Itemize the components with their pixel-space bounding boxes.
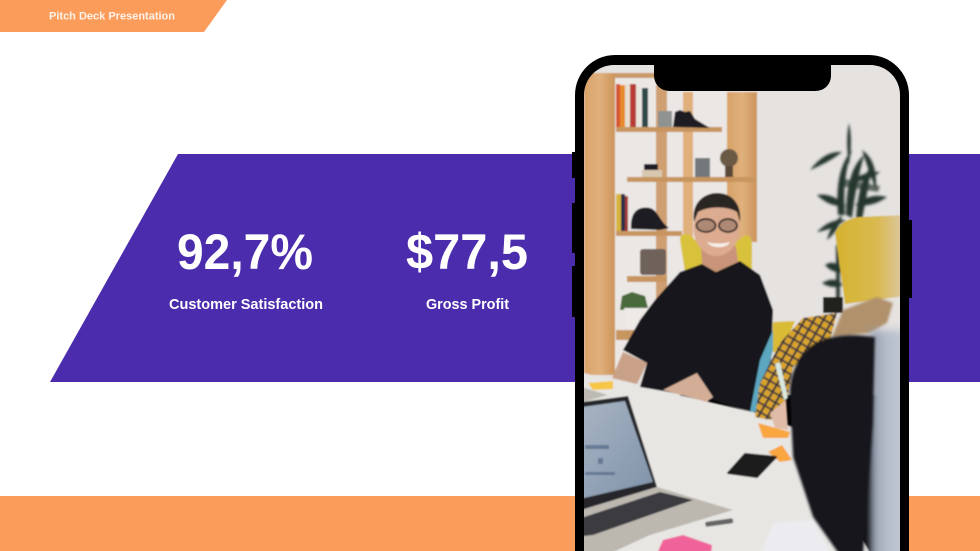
sticky notes xyxy=(588,381,792,551)
bottom orange band xyxy=(0,496,980,551)
plaid shirt xyxy=(755,313,837,420)
glasses xyxy=(696,219,737,232)
smile xyxy=(707,242,730,247)
hair xyxy=(694,193,740,222)
phone notch xyxy=(654,62,831,91)
phone on table xyxy=(728,454,776,477)
stat: gross profit xyxy=(406,224,528,313)
head xyxy=(694,200,740,256)
plant pot xyxy=(823,297,843,313)
neck xyxy=(701,246,738,272)
yellow chair seat xyxy=(772,321,795,352)
phone body xyxy=(575,55,909,551)
stat value: 92,7% xyxy=(177,224,313,280)
stat value: $77,5 xyxy=(406,224,528,280)
phone mockup xyxy=(572,55,912,551)
chair behind man xyxy=(680,234,752,272)
pencil xyxy=(775,362,788,400)
header text: Pitch Deck Presentation xyxy=(49,10,175,22)
left forearm xyxy=(612,352,647,384)
colleague in plaid xyxy=(755,297,893,430)
stat label: Customer Satisfaction xyxy=(169,296,323,313)
blonde hair xyxy=(832,297,893,337)
plant xyxy=(810,123,887,300)
sweater xyxy=(623,261,773,412)
laptop xyxy=(575,385,733,551)
wall xyxy=(575,55,910,395)
yellow armchair xyxy=(835,215,905,304)
hand xyxy=(770,400,788,430)
stat label: Gross Profit xyxy=(426,296,509,313)
table xyxy=(575,371,880,551)
panel: purple band xyxy=(50,154,980,382)
right forearm xyxy=(663,373,713,402)
blue chair edge xyxy=(750,330,773,412)
foreground blurred strip xyxy=(870,330,910,551)
stat: customer satisfaction xyxy=(169,224,323,313)
foreground dark hair xyxy=(790,335,875,551)
photo: team meeting xyxy=(575,55,910,551)
man xyxy=(612,193,773,412)
header tab xyxy=(0,0,227,32)
side buttons xyxy=(572,152,912,317)
shelving unit xyxy=(584,73,757,375)
foreground white shirt xyxy=(763,521,829,551)
